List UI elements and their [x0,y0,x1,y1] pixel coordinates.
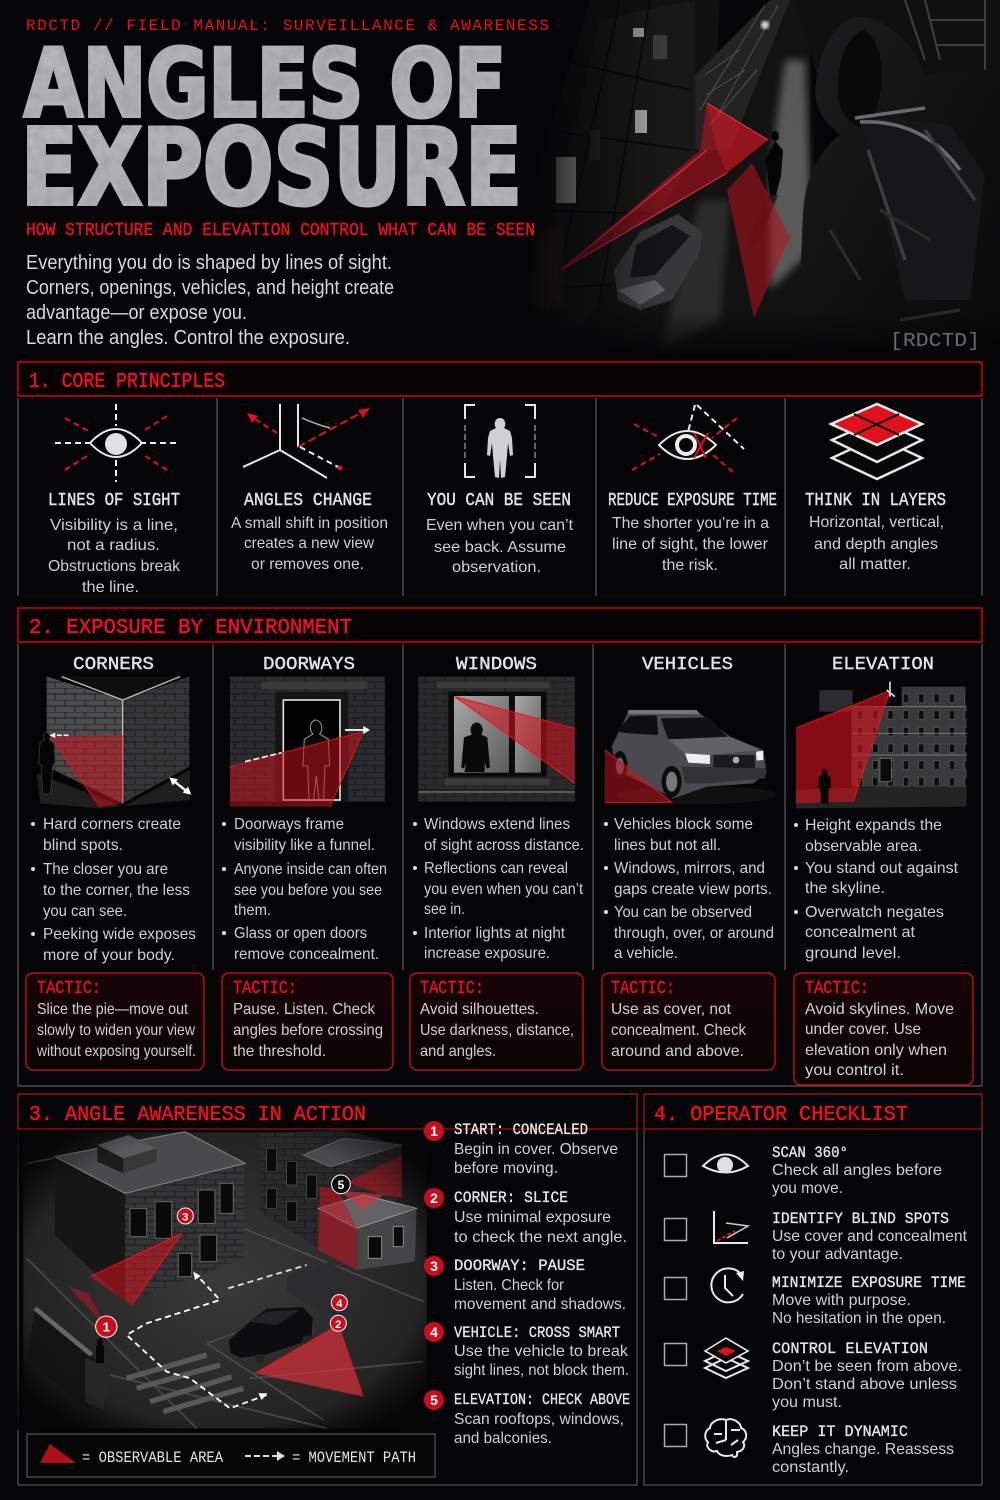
bullets: vehicles: Windows, mirrors, and [614,860,765,877]
bullets: doorways: remove concealment. [234,946,379,963]
bullets: elevation: Height expands the [805,817,942,834]
checklist item: dynamic: Angles change. Reassess [772,1441,954,1458]
step 2: to check the next angle. [454,1229,627,1246]
column: windows: WINDOWS [456,655,537,675]
title: ANGLES OF [24,30,506,139]
bullets: windows: Interior lights at night [424,925,566,942]
checklist item: dynamic: constantly. [772,1459,849,1476]
column: vehicles [602,655,777,1070]
tactic: doorways: the threshold. [233,1043,326,1060]
bullets: corners [31,816,196,964]
step 3 [424,1256,626,1313]
tactic: vehicles: Use as cover, not [611,1001,732,1018]
checklist item: blind spots [664,1210,968,1263]
bullets: vehicles: through, over, or around [614,925,774,942]
principle: think in layers: and depth angles [814,536,938,553]
bullets: vehicles: Vehicles block some [614,816,753,833]
step 2: 2 [430,1190,438,1206]
bullets: vehicles: gaps create view ports. [614,881,772,898]
bullets: corners: to the corner, the less [43,882,190,899]
column: corners: CORNERS [73,655,154,675]
bullets: elevation [794,817,959,962]
tactic: corners: slowly to widen your view [37,1022,195,1039]
section 4: operator checklist [644,1094,982,1485]
principle: think in layers: THINK IN LAYERS [805,491,946,511]
icon: corner with shifting angles [243,404,370,478]
step 4: Use the vehicle to break [454,1343,629,1360]
scene: lit window with silhouette [418,677,575,802]
bullets: corners: blind spots. [43,837,123,854]
step 3: Listen. Check for [454,1277,565,1294]
principle: lines of sight: LINES OF SIGHT [48,491,180,511]
tactic: corners [26,973,204,1070]
tactic: elevation [794,973,973,1085]
badges: 5 [338,1178,345,1192]
hooded figure [795,17,1000,360]
checklist item: blind spots: Use cover and concealment [772,1228,968,1245]
tactic: corners: Slice the pie—move out [37,1001,188,1018]
step 1: before moving. [454,1160,558,1177]
icon: stacked layers [831,404,922,479]
legend [27,1434,435,1477]
bullets: elevation: ground level. [805,945,901,962]
bullets: corners: The closer you are [43,861,168,878]
movement path [127,1273,267,1408]
tactic: corners: without exposing yourself. [36,1043,196,1060]
distant person [765,131,783,195]
bullets: corners: Hard corners create [43,816,181,833]
bullets: elevation: Overwatch negates [805,904,944,921]
bullets: windows: Windows extend lines [424,816,570,833]
tactic: vehicles: around and above. [611,1043,744,1060]
badges: 2 [335,1319,341,1331]
bullets: vehicles: lines but not all. [614,837,721,854]
checklist item: scan: SCAN 360° [772,1144,848,1162]
checklist item: dynamic [664,1419,954,1476]
tactic: windows: TACTIC: [420,979,484,999]
observable areas [90,1233,182,1305]
figure [96,1338,104,1363]
principle: angles change: or removes one. [251,556,364,573]
principle: angles change: creates a new view [244,535,374,552]
tactic: elevation: you control it. [805,1062,904,1079]
legend: = MOVEMENT PATH [292,1449,416,1467]
brand mark: [RDCTD] [890,330,980,352]
icon: eye with reduced time [632,405,744,472]
principle: angles change: A small shift in position [231,515,388,532]
principle: reduce exposure time: REDUCE EXPOSURE TIME [608,491,777,511]
bullets: windows: you even when you can’t [424,881,583,898]
brand eyebrow: RDCTD // FIELD MANUAL: SURVEILLANCE & AWARENESS [26,17,549,35]
checklist item: elevation: Don’t stand above unless [772,1376,957,1393]
bullets: windows [413,816,584,962]
badges: 3 [182,1212,188,1224]
checklist item: scan: Check all angles before [772,1162,942,1179]
hero image: alley with hooded observer [470,0,1000,360]
column: elevation: ELEVATION [832,655,934,675]
principle: lines of sight [48,491,181,596]
column: doorways: DOORWAYS [263,655,355,675]
tactic: doorways [222,973,393,1070]
tactic: windows [410,973,583,1070]
intro text: Everything you do is shaped by lines of sight. [26,252,392,274]
building small [318,1208,357,1270]
bullets: corners: Peeking wide exposes [43,926,196,943]
red sight cones [561,103,768,270]
principle: reduce exposure time: The shorter you’re in a [612,515,769,532]
step 5: 5 [430,1392,438,1408]
checklist item: elevation: you must. [772,1394,842,1411]
step 1 [424,1121,618,1177]
title [21,30,522,229]
title: EXPOSURE [21,107,522,229]
car [614,214,702,310]
principle: lines of sight: not a radius. [67,537,160,554]
step 1: 1 [430,1123,438,1139]
bullets: elevation: concealment at [805,924,916,941]
tactic: vehicles: TACTIC: [611,979,675,999]
bullets: elevation: You stand out against [805,860,959,877]
column: corners [26,655,204,1070]
checklist item: exposure time [664,1268,966,1327]
tactic: elevation: elevation only when [805,1042,947,1059]
bullets: vehicles: a vehicle. [614,945,678,962]
step 4: sight lines, not block them. [454,1362,629,1379]
step 3: movement and shadows. [454,1296,626,1313]
principle: reduce exposure time: the risk. [662,557,718,574]
bullets: elevation: observable area. [805,838,922,855]
column: windows [410,655,584,1070]
step 5: ELEVATION: CHECK ABOVE [454,1391,630,1409]
principle: lines of sight: Visibility is a line, [50,517,178,534]
scene: corner wall with observer [37,677,191,808]
bullets: windows: of sight across distance. [424,837,584,854]
intro text: Corners, openings, vehicles, and height create [26,277,394,299]
column: vehicles: VEHICLES [642,655,733,675]
checklist item: elevation: Don’t be seen from above. [772,1358,962,1375]
bullets: doorways: Doorways frame [234,816,344,833]
tactic: doorways: TACTIC: [233,979,297,999]
heading: core principles: 1. CORE PRINCIPLES [29,371,225,394]
tactic: elevation: Avoid skylines. Move [805,1001,954,1018]
legend: = OBSERVABLE AREA [82,1449,223,1467]
step 4: VEHICLE: CROSS SMART [454,1324,620,1342]
bullets: doorways [222,816,387,963]
intro text: Learn the angles. Control the exposure. [26,327,350,349]
column: doorways [222,655,393,1070]
checklist item: blind spots: to your advantage. [772,1246,903,1263]
crosswalk [127,1355,243,1412]
step 5 [424,1390,630,1447]
building 1 [55,1157,125,1302]
tactic: elevation: TACTIC: [805,979,869,999]
bullets: corners: more of your body. [43,947,175,964]
isometric map [17,1130,427,1430]
checklist item: blind spots: IDENTIFY BLIND SPOTS [772,1210,949,1228]
icon: eye with sight lines [55,404,177,482]
intro text [26,252,394,349]
tactic: vehicles: concealment. Check [611,1022,747,1039]
badges: 1 [103,1320,111,1335]
intro text: advantage—or expose you. [26,302,247,324]
principle: lines of sight: the line. [82,579,139,596]
bullets: vehicles: You can be observed [614,904,752,921]
principle: think in layers [805,491,946,573]
badges [96,1175,350,1337]
step 2 [424,1188,627,1246]
checklist item: exposure time: Move with purpose. [772,1292,911,1309]
checklist item: exposure time: MINIMIZE EXPOSURE TIME [772,1274,966,1292]
tactic: doorways: Pause. Listen. Check [233,1001,376,1018]
bullets: doorways: Anyone inside can often [234,861,387,878]
principle: reduce exposure time [608,491,777,574]
section 2: exposure by environment [18,608,982,1086]
section 1: core principles [18,362,982,596]
principle: angles change [231,491,388,573]
principle: you can be seen: Even when you can’t [426,517,574,534]
checklist item: scan: you move. [772,1180,843,1197]
bullets: windows: increase exposure. [424,945,550,962]
bullets: windows: Reflections can reveal [424,860,568,877]
tactic: corners: TACTIC: [37,979,101,999]
checklist item: scan [664,1144,942,1197]
bullets: corners: you can see. [43,903,127,920]
checklist item: dynamic: KEEP IT DYNAMIC [772,1423,908,1441]
step 4 [424,1322,629,1379]
step 5: and balconies. [454,1430,552,1447]
bullets: elevation: the skyline. [805,880,885,897]
bullets: doorways: them. [234,902,271,919]
bullets: doorways: Glass or open doors [234,925,367,942]
step 3: DOORWAY: PAUSE [454,1257,585,1275]
checklist item: elevation [664,1338,962,1411]
tactic: doorways: angles before crossing [233,1022,383,1039]
building 2 [260,1130,402,1255]
principle: you can be seen: see back. Assume [434,539,566,556]
principle: think in layers: Horizontal, vertical, [809,514,944,531]
heading: angle awareness: 3. ANGLE AWARENESS IN ACTION [29,1104,366,1127]
step 1: Begin in cover. Observe [454,1141,618,1158]
heading: exposure by environment: 2. EXPOSURE BY ENVIRONMENT [29,617,352,640]
checklist item: exposure time: No hesitation in the open. [772,1310,946,1327]
principle: you can be seen: YOU CAN BE SEEN [427,491,571,511]
subtitle: HOW STRUCTURE AND ELEVATION CONTROL WHAT CAN BE SEEN [26,221,535,241]
bullets: doorways: visibility like a funnel. [234,837,375,854]
principle: you can be seen [426,491,574,576]
step 3: 3 [430,1258,438,1274]
scene: rooftop overwatch [796,682,967,808]
heading: operator checklist: 4. OPERATOR CHECKLIST [654,1104,908,1127]
step 2: Use minimal exposure [454,1209,611,1226]
section 3: angle awareness in action [17,1094,637,1485]
step 1: START: CONCEALED [454,1121,588,1139]
bullets: vehicles [604,816,774,962]
icon: person in brackets [465,405,535,478]
step 4: 4 [430,1324,438,1340]
tactic: windows: and angles. [420,1043,496,1060]
principle: you can be seen: observation. [452,559,541,576]
principle: reduce exposure time: line of sight, the lower [612,536,769,553]
checklist item: elevation: CONTROL ELEVATION [772,1340,928,1358]
step 5: Scan rooftops, windows, [454,1411,624,1428]
tactic: vehicles [602,973,775,1070]
principle: angles change: ANGLES CHANGE [244,491,372,511]
scene: grey SUV [605,710,777,804]
tactic: windows: Avoid silhouettes. [420,1001,539,1018]
scene: doorway with silhouette [230,677,385,807]
tactic: windows: Use darkness, distance, [420,1022,574,1039]
step 2: CORNER: SLICE [454,1189,568,1207]
principle: lines of sight: Obstructions break [48,558,181,575]
car [228,1307,313,1358]
bullets: windows: see in. [424,901,465,918]
bullets: doorways: see you before you see [234,882,382,899]
tactic: elevation: under cover. Use [805,1021,921,1038]
column: elevation [794,655,973,1085]
badges: 4 [336,1298,343,1310]
principle: think in layers: all matter. [839,556,911,573]
